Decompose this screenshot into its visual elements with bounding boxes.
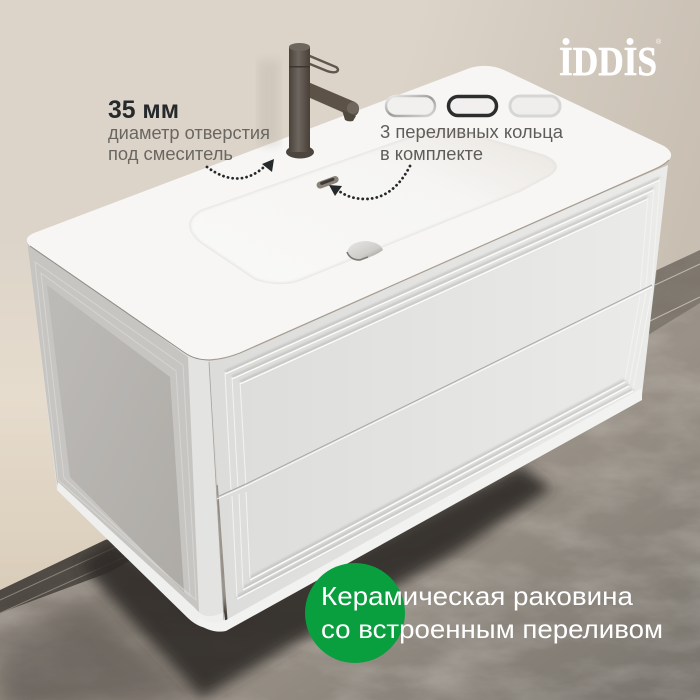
arrow: to overflow slot [329,166,410,199]
body [289,47,310,152]
logo: ® [656,38,662,46]
cabinet side panel [27,238,226,629]
cabinet shadow on floor [80,465,552,698]
ring: black [448,96,496,116]
base [286,146,314,158]
callout: hole diameter: под смеситель [108,144,233,164]
headline caption [321,581,663,644]
spout [301,79,359,116]
headline caption: Керамическая раковина [321,581,634,611]
lower drawer moulding [232,290,652,599]
headline caption: со встроенным переливом [321,614,663,644]
faucet [258,43,359,158]
callout: overflow rings [380,96,564,164]
loop handle [305,54,338,72]
green badge circle [305,563,405,663]
callout: hole diameter [108,96,270,164]
value: 35 мм [108,96,179,124]
vanity cabinet [27,165,668,632]
logo: IDDIS [559,38,657,84]
ceramic countertop [27,66,671,360]
faucet shadow [258,60,280,145]
upper drawer moulding [225,178,660,490]
ring: silver [386,96,435,116]
overflow slot [316,175,340,190]
description: диаметр отверстия [108,123,270,143]
cabinet front [196,165,668,632]
drain [347,241,383,260]
description: 3 переливных кольца [380,122,564,142]
drawer gap [217,285,652,497]
lower wall under the cabinet [0,230,110,600]
arrow: to faucet hole [207,159,274,178]
callout: overflow rings: в комплекте [380,144,483,164]
basin [189,128,557,284]
dark floor area at lower left [0,600,210,700]
ring: white [510,96,560,116]
marble floor and baseboard [0,240,700,700]
